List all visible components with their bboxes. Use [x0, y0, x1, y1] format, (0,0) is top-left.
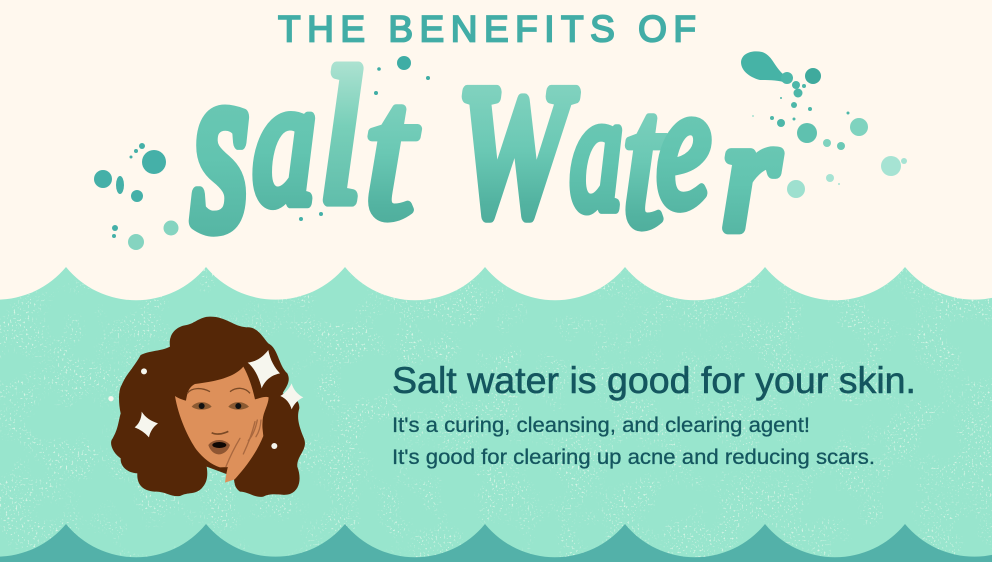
benefit heading: Salt water is good for your skin. [392, 360, 916, 401]
brush title: Salt Water: a [253, 42, 315, 241]
brush title: Salt Water: W [458, 49, 577, 253]
mint scalloped wave panel [0, 260, 992, 562]
brush title: Salt Water [192, 12, 779, 278]
paint splatter: right [741, 51, 907, 198]
benefit description [392, 413, 875, 469]
paint splatter: top centre [374, 56, 430, 95]
hand on cheek [225, 417, 263, 483]
eyebrows [187, 388, 250, 393]
sparkles [108, 350, 303, 449]
face [175, 367, 269, 467]
brush title: Salt Water: r [722, 87, 779, 264]
hair [111, 317, 305, 497]
brush title: Salt Water: a [570, 61, 622, 245]
eyes [192, 402, 249, 410]
finger lines [226, 420, 261, 467]
brush title: Salt Water: l [320, 31, 362, 242]
brush title: Salt Water: t [364, 48, 418, 258]
benefit description: It's good for clearing up acne and reducing scars. [392, 445, 875, 469]
paint splatter: left [94, 143, 323, 250]
brush title: Salt Water: t [622, 56, 667, 267]
brush title: Salt Water: e [657, 50, 710, 243]
illustration: woman with curly hair touching her cheek [108, 317, 305, 497]
dark teal bottom wave [0, 524, 992, 562]
benefit description: It's a curing, cleansing, and clearing agent! [392, 413, 810, 437]
heading: The Benefits of: THE BENEFITS OF [278, 8, 696, 50]
nose [212, 431, 228, 434]
mouth [208, 440, 230, 454]
brush title: Salt Water: s [192, 12, 248, 278]
